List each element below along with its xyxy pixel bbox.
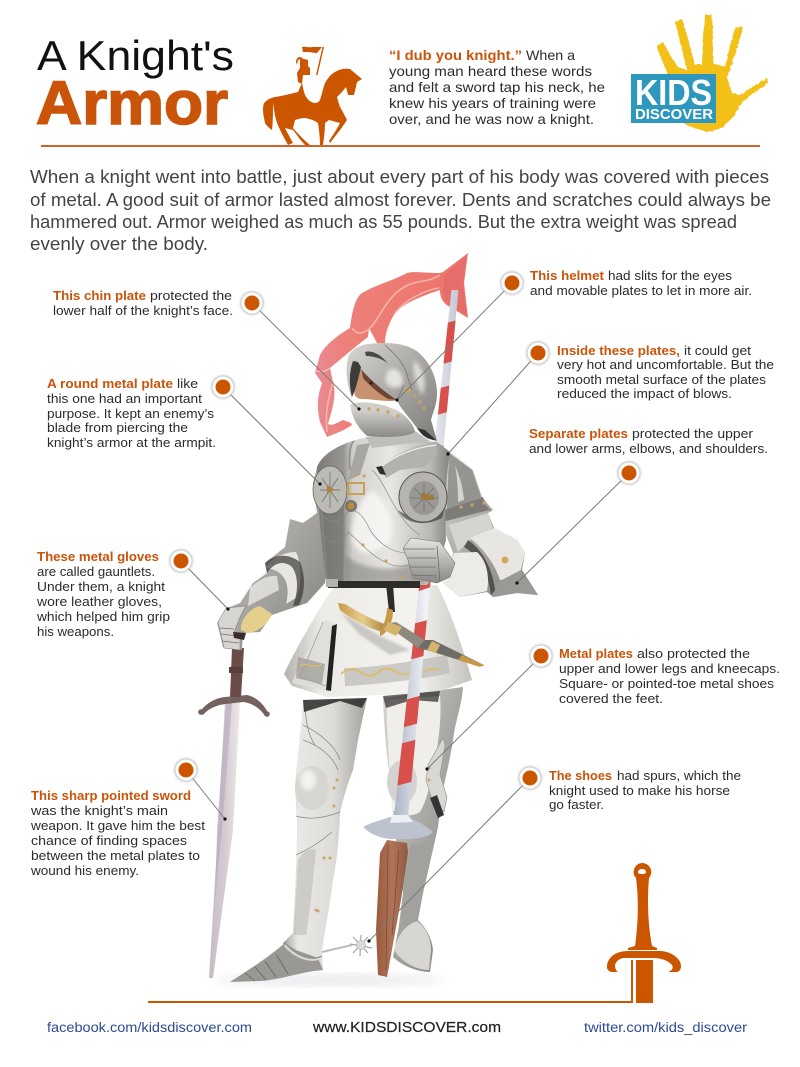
- label: helmet: had slits for the eyes: [608, 268, 733, 283]
- footer links: facebook.com/kidsdiscover.com: [47, 1020, 252, 1035]
- title: Armor: [36, 69, 228, 137]
- label: sword: weapon. It gave him the best: [30, 818, 205, 833]
- title: [36, 32, 234, 137]
- label: metal plates: covered the feet.: [559, 691, 663, 706]
- footer links: www.KIDSDISCOVER.com: [312, 1019, 501, 1036]
- label: gloves: which helped him grip: [36, 609, 170, 624]
- rivets: [353, 473, 404, 579]
- intro paragraph: [30, 167, 771, 254]
- label: metal plates: upper and lower legs and kneecaps.: [559, 661, 780, 676]
- chin plate: [350, 402, 415, 437]
- label: inside plates: Inside these plates,: [557, 343, 680, 358]
- intro paragraph: of metal. A good suit of armor lasted almost forever. Dents and scratches could always be: [30, 190, 771, 210]
- rear leg: [383, 687, 463, 972]
- label: gloves: Under them, a knight: [37, 579, 165, 594]
- label: round plate: like: [177, 376, 198, 391]
- label: gloves: his weapons.: [37, 624, 114, 639]
- marker: shoes: [518, 766, 542, 790]
- footer links: [47, 1019, 748, 1036]
- label: round plate: knight’s armor at the armpit.: [47, 435, 216, 450]
- intro paragraph: evenly over the body.: [30, 234, 208, 254]
- label: shoes: go faster.: [549, 797, 604, 812]
- label: shoes: had spurs, which the: [617, 768, 741, 783]
- marker: separate plates: [618, 462, 640, 484]
- label: chin plate: lower half of the knight’s face.: [53, 303, 233, 318]
- dagger: [338, 603, 484, 667]
- label: sword: chance of finding spaces: [31, 833, 188, 848]
- label: helmet: and movable plates to let in more air.: [530, 283, 752, 298]
- leader lines: [181, 283, 629, 941]
- tunic skirt: [284, 585, 472, 712]
- label: metal plates: [559, 646, 780, 706]
- label: separate plates: Separate plates: [529, 426, 628, 441]
- intro quote text: over, and he was now a knight.: [389, 111, 594, 127]
- title: A Knight's: [37, 32, 234, 79]
- marker: gloves: [170, 550, 192, 572]
- marker: sword: [174, 758, 198, 782]
- label: round plate: [47, 376, 216, 450]
- intro quote text: young man heard these words: [389, 63, 592, 79]
- gold rivets on legs: [314, 766, 430, 912]
- label: sword: between the metal plates to: [31, 848, 200, 863]
- label: inside plates: smooth metal surface of the plates: [557, 372, 767, 387]
- intro quote text: [389, 47, 605, 127]
- label: inside plates: very hot and uncomfortable. But the: [557, 357, 774, 372]
- label: inside plates: it could get: [684, 343, 751, 358]
- pennant flag: [315, 253, 468, 437]
- label: chin plate: This chin plate: [53, 288, 146, 303]
- buckle: [345, 483, 364, 512]
- front leg and shoe: [230, 698, 372, 982]
- label: metal plates: Metal plates: [559, 646, 633, 661]
- belt: [326, 579, 420, 612]
- label: gloves: These metal gloves: [37, 549, 159, 564]
- lance butt: [363, 815, 433, 977]
- icon: sword hilt: [607, 863, 681, 1003]
- label: sword: wound his enemy.: [30, 863, 139, 878]
- label: sword: was the knight’s main: [30, 803, 168, 818]
- label: metal plates: Square- or pointed-toe metal shoes: [559, 676, 775, 691]
- intro paragraph: hammered out. Armor weighed as much as 55 pounds. But the extra weight was spread: [30, 212, 737, 232]
- viewer-left arm and gauntlet: [217, 467, 335, 650]
- intro quote text: When a: [526, 47, 575, 63]
- icon: knight on horse: [263, 47, 362, 145]
- label: inside plates: reduced the impact of blows.: [557, 386, 732, 401]
- label: helmet: [530, 268, 752, 298]
- label: inside plates: [557, 343, 774, 401]
- label: shoes: knight used to make his horse: [549, 783, 730, 798]
- marker: helmet: [500, 272, 524, 294]
- breastplate: [313, 431, 450, 612]
- intro quote text: knew his years of training were: [389, 95, 596, 111]
- label: gloves: are called gauntlets.: [37, 564, 155, 579]
- label: round plate: purpose. It kept an enemy’s: [47, 406, 215, 421]
- marker: metal plates: [530, 644, 552, 668]
- helmet group: [347, 343, 437, 441]
- marker: chin plate: [240, 292, 264, 314]
- marker: inside plates: [526, 342, 550, 364]
- label: separate plates: and lower arms, elbows, and shoulders.: [529, 441, 768, 456]
- helmet shell: [347, 343, 437, 441]
- lance shaft: [394, 290, 458, 815]
- illustration: knight in armor: [198, 253, 538, 985]
- label: metal plates: also protected the: [637, 646, 750, 661]
- viewer-right arm and elbow: [442, 452, 538, 597]
- label: helmet: This helmet: [530, 268, 605, 283]
- icon: yellow hand: [650, 15, 768, 132]
- intro quote text: “I dub you knight.”: [389, 47, 522, 63]
- label: shoes: The shoes: [549, 768, 612, 783]
- armpit round plates: [313, 466, 447, 523]
- label: round plate: A round metal plate: [47, 376, 173, 391]
- intro paragraph: When a knight went into battle, just about every part of his body was covered with pieces: [30, 167, 769, 187]
- label: round plate: blade from piercing the: [47, 420, 188, 435]
- label: chin plate: protected the: [150, 288, 232, 303]
- logo: Kids Discover hand: KIDS: [635, 72, 712, 113]
- label: gloves: [36, 549, 170, 639]
- footer links: twitter.com/kids_discover: [584, 1020, 748, 1035]
- label: sword: This sharp pointed sword: [31, 788, 191, 803]
- label: sword: [30, 788, 205, 878]
- intro quote text: and felt a sword tap his neck, he: [389, 79, 605, 95]
- marker: round plate: [212, 376, 234, 398]
- label: round plate: this one had an important: [47, 391, 202, 406]
- spur: [322, 945, 352, 952]
- label: gloves: wore leather gloves,: [36, 594, 162, 609]
- label: shoes: [549, 768, 741, 812]
- logo: Kids Discover hand: DISCOVER: [635, 106, 713, 123]
- logo: Kids Discover hand: [631, 15, 768, 132]
- label: separate plates: [529, 426, 768, 456]
- face: [354, 367, 397, 401]
- sword: [198, 648, 270, 978]
- label: chin plate: [53, 288, 233, 318]
- hand on lance: [403, 538, 455, 583]
- ground shadow: [215, 975, 445, 985]
- footer rule: [148, 1001, 632, 1003]
- header rule: [41, 145, 760, 147]
- logo badge: [631, 74, 716, 123]
- label: separate plates: protected the upper: [632, 426, 754, 441]
- leader end dots: [223, 398, 519, 943]
